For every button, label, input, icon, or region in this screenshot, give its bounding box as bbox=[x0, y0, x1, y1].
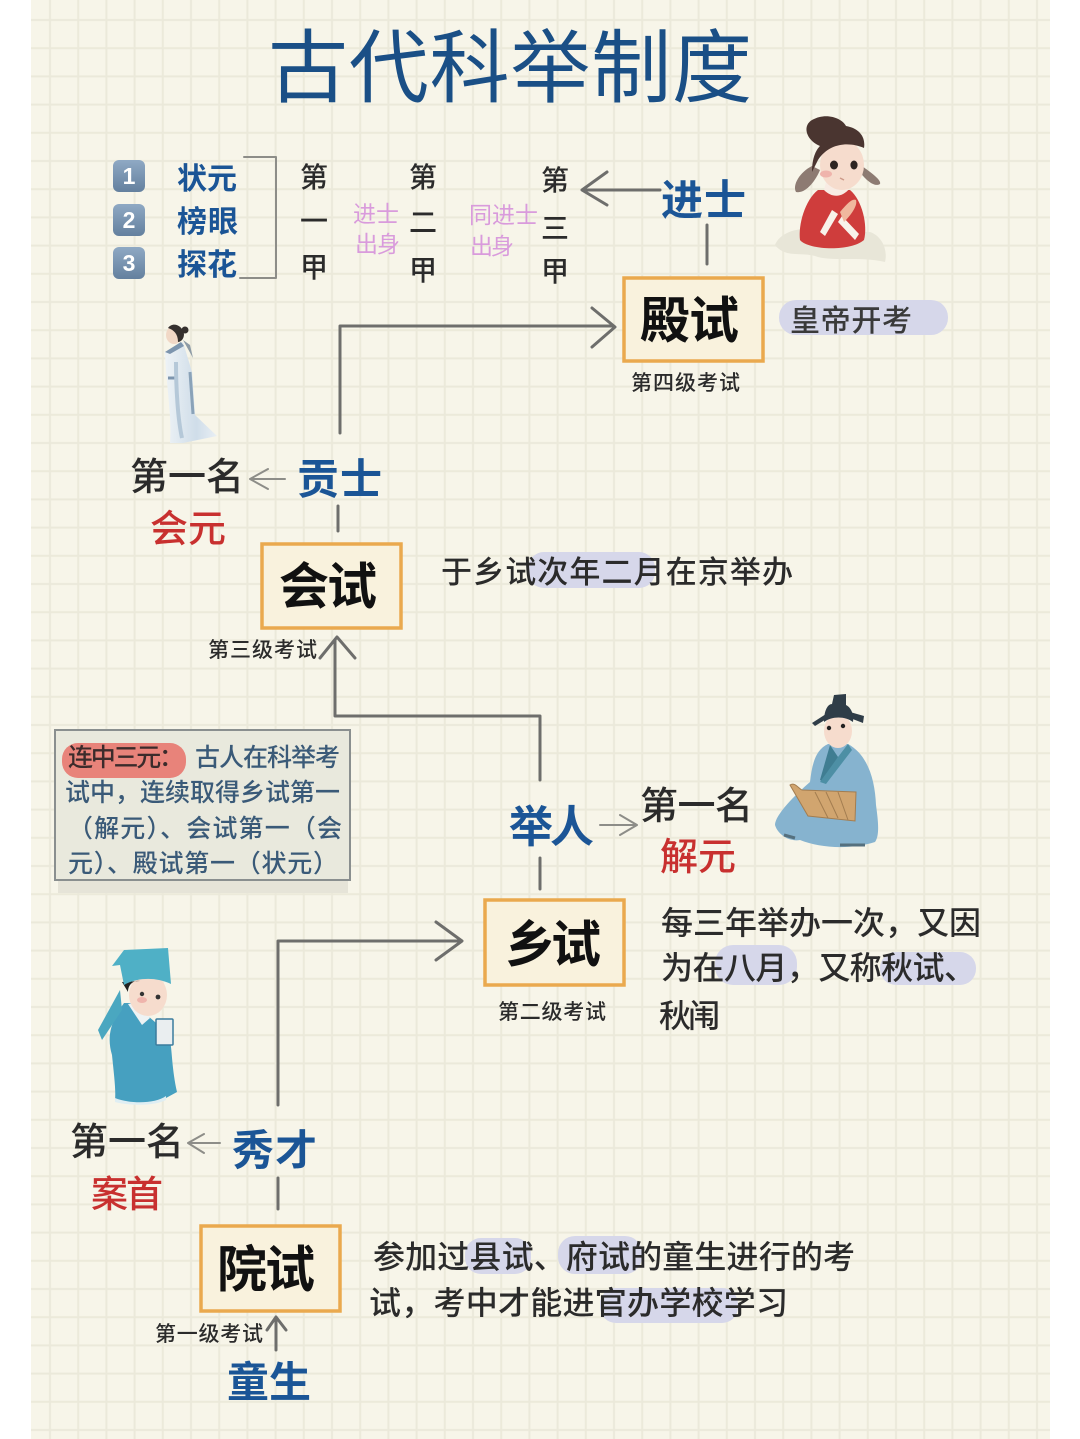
icon: badge 2: 2 bbox=[123, 207, 135, 233]
column: 第二甲: 二 bbox=[409, 207, 437, 238]
note: 院试 description bbox=[369, 1236, 855, 1323]
figure: scholar with turquoise hat bbox=[98, 948, 177, 1105]
ranking list: top three of first class bbox=[113, 157, 276, 282]
label: 举人: 举人 bbox=[509, 803, 594, 852]
label: 解元: 解元 bbox=[660, 837, 736, 879]
box: 会试 bbox=[262, 544, 401, 628]
note: 院试 description: 参加过县试、府试的童生进行的考 bbox=[373, 1239, 855, 1275]
label: 贡士: 贡士 bbox=[297, 456, 382, 503]
connector: 秀才 to 院试 bbox=[276, 1178, 280, 1209]
callout: 连中三元: 连中三元： bbox=[68, 744, 184, 772]
box: 殿试 bbox=[624, 278, 763, 361]
label: 进士: 进士 bbox=[661, 177, 746, 224]
icon: badge 3 bbox=[113, 247, 145, 279]
box: 乡试: 乡试 bbox=[505, 917, 601, 973]
connector: 举人 to 乡试 bbox=[538, 858, 542, 889]
icon: badge 3: 3 bbox=[123, 250, 135, 276]
label: 第一名 (院试): 第一名 bbox=[70, 1122, 184, 1164]
note: 院试 description: 试，考中才能进官办学校学习 bbox=[369, 1285, 788, 1321]
box: 院试 bbox=[201, 1226, 340, 1311]
icon: badge 1 bbox=[113, 160, 145, 192]
highlight note: 皇帝开考: 皇帝开考 bbox=[790, 305, 912, 338]
note: 进士出身: 进士 bbox=[353, 201, 399, 227]
caption: 第三级考试: 第三级考试 bbox=[208, 639, 317, 662]
box: 乡试 bbox=[485, 900, 624, 985]
column: 第二甲: 甲 bbox=[409, 255, 437, 286]
column: 第一甲: 甲 bbox=[300, 252, 328, 283]
callout: 连中三元: 古人在科举考 bbox=[195, 744, 340, 772]
note: 乡试 timing bbox=[659, 905, 981, 1034]
note: 进士出身: 出身 bbox=[355, 231, 400, 257]
callout: 连中三元: （解元）、会试第一（会 bbox=[68, 815, 342, 843]
arrow: 举人 to 第一名 bbox=[600, 815, 637, 835]
label: 童生: 童生 bbox=[227, 1359, 311, 1406]
highlight note: 皇帝开考 bbox=[779, 300, 948, 338]
column: 第三甲 bbox=[541, 165, 569, 287]
label: 案首: 案首 bbox=[91, 1174, 163, 1215]
note: 乡试 timing: 秋闱 bbox=[659, 998, 720, 1034]
label: 第一名 (乡试): 第一名 bbox=[640, 786, 753, 828]
note: 乡试 timing: 每三年举办一次，又因 bbox=[661, 905, 981, 941]
label: 状元: 状元 bbox=[177, 163, 237, 196]
arrow: 贡士 to 殿试 bbox=[340, 308, 615, 433]
note: 进士出身 bbox=[353, 201, 400, 257]
callout: 连中三元 bbox=[55, 730, 350, 893]
title: 古代科举制度 bbox=[268, 24, 752, 113]
bracket bbox=[240, 157, 276, 278]
box: 院试: 院试 bbox=[217, 1242, 315, 1298]
arrow: 举人 to 会试 bbox=[320, 637, 540, 780]
box: 会试: 会试 bbox=[279, 559, 377, 615]
note: 同进士出身: 出身 bbox=[470, 233, 514, 259]
callout: 连中三元: 试中，连续取得乡试第一 bbox=[65, 779, 340, 807]
box: 殿试: 殿试 bbox=[640, 293, 739, 349]
arrow: 贡士 to 第一名 bbox=[250, 469, 285, 489]
note: 会试 timing: 于乡试次年二月在京举办 bbox=[441, 555, 793, 590]
caption: 第四级考试: 第四级考试 bbox=[631, 372, 740, 395]
column: 第一甲: 第 bbox=[300, 162, 328, 193]
arrow: 秀才 to 乡试 bbox=[278, 922, 462, 1105]
note: 同进士出身 bbox=[469, 202, 538, 259]
column: 第三甲: 甲 bbox=[541, 256, 569, 287]
connector: 贡士 to 会试 bbox=[336, 506, 340, 531]
figure: standing scholar in pale robe bbox=[165, 325, 217, 443]
column: 第三甲: 三 bbox=[541, 213, 569, 244]
column: 第一甲: 一 bbox=[300, 206, 328, 237]
label: 会元: 会元 bbox=[150, 509, 226, 551]
icon: badge 1: 1 bbox=[123, 163, 136, 189]
label: 第一名 (会试): 第一名 bbox=[130, 457, 244, 499]
figure: seated scholar with book bbox=[775, 694, 878, 847]
column: 第二甲 bbox=[409, 162, 437, 286]
label: 探花: 探花 bbox=[177, 249, 237, 282]
note: 同进士出身: 同进士 bbox=[469, 202, 538, 228]
caption: 第二级考试: 第二级考试 bbox=[498, 1001, 606, 1024]
caption: 第一级考试: 第一级考试 bbox=[155, 1323, 263, 1346]
note: 乡试 timing: 为在八月，又称秋试、 bbox=[661, 950, 976, 986]
label: 榜眼: 榜眼 bbox=[177, 206, 238, 239]
arrow: 童生 to 院试 bbox=[267, 1317, 286, 1350]
connector: 进士 to 殿试 bbox=[706, 225, 708, 264]
figure: scholar in red robe bbox=[775, 116, 886, 262]
icon: badge 2 bbox=[113, 204, 145, 236]
column: 第一甲 bbox=[300, 162, 328, 283]
label: 秀才: 秀才 bbox=[232, 1127, 317, 1174]
column: 第二甲: 第 bbox=[409, 162, 437, 193]
column: 第三甲: 第 bbox=[541, 165, 569, 196]
arrow: 进士 to 第三甲 bbox=[582, 172, 660, 205]
arrow: 秀才 to 第一名 bbox=[188, 1134, 220, 1153]
callout: 连中三元: 元）、殿试第一（状元） bbox=[68, 850, 338, 878]
